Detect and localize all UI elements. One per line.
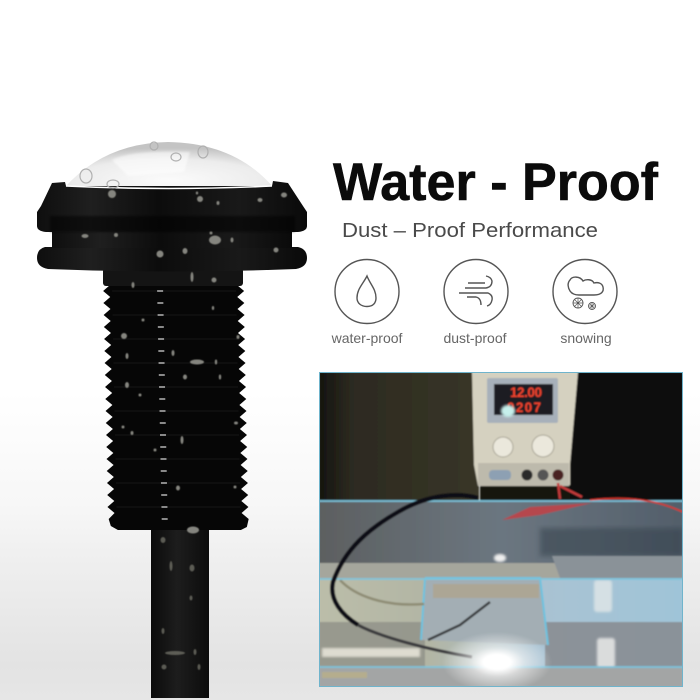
lens dome — [65, 142, 273, 187]
icon: dust-proof — [444, 260, 508, 324]
dark wall left — [319, 372, 479, 502]
black cable — [332, 495, 478, 625]
cap shadow band — [50, 216, 295, 232]
icon: snowing — [553, 260, 617, 324]
label: snowing: snowing — [560, 330, 612, 346]
label: water-proof: water-proof — [331, 330, 403, 346]
tank edges — [319, 501, 683, 667]
display glare — [501, 405, 515, 417]
tank back wall — [319, 501, 683, 563]
red clip — [502, 503, 592, 520]
lower flange — [37, 247, 307, 272]
submerged cable — [428, 602, 490, 640]
photo border — [320, 372, 682, 686]
thread grooves — [112, 291, 240, 507]
reflection — [494, 554, 506, 562]
title: Water - Proof — [333, 153, 658, 212]
tank ledge — [320, 562, 560, 579]
neck — [103, 268, 243, 286]
current reading: 0207 — [507, 400, 541, 415]
icon: water-proof — [335, 260, 399, 324]
upper cap — [37, 181, 307, 232]
water drops — [82, 190, 287, 534]
red clips — [558, 483, 582, 499]
groove — [52, 232, 292, 248]
threaded body — [103, 280, 249, 530]
LED light product — [37, 142, 307, 698]
front plate — [422, 578, 548, 645]
label: dust-proof: dust-proof — [443, 330, 507, 346]
subtitle: Dust – Proof Performance — [342, 219, 598, 242]
red wire — [590, 498, 683, 512]
knobs — [493, 437, 513, 457]
display panel — [487, 378, 558, 423]
LED glow — [446, 634, 548, 686]
lens drops — [80, 142, 208, 188]
thread highlights — [157, 291, 168, 519]
display screen — [494, 384, 553, 415]
lens highlight — [112, 152, 190, 176]
power supply — [472, 372, 582, 501]
terminal panel — [478, 463, 569, 486]
photo: water tank test — [319, 372, 683, 692]
voltage reading: 12.00 — [510, 385, 542, 400]
cable — [151, 525, 209, 698]
dark wall right — [565, 372, 683, 502]
terminals — [522, 470, 532, 480]
pale submerged loop — [340, 580, 424, 604]
tank floor — [319, 578, 683, 670]
bottom strip — [319, 668, 683, 687]
lens rim — [66, 186, 272, 188]
